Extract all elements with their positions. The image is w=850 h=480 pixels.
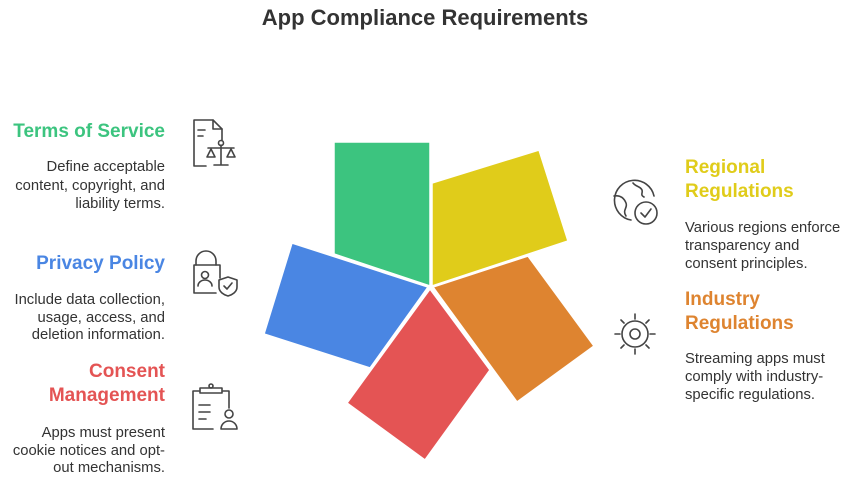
block: terms of service: Define acceptable bbox=[47, 159, 165, 175]
block: consent management: Management bbox=[49, 385, 166, 406]
block: industry regulations: Industry bbox=[685, 289, 760, 310]
block: consent management: Apps must present bbox=[42, 425, 165, 441]
segment: privacy policy bbox=[264, 243, 428, 368]
block: terms of service: content, copyright, and bbox=[15, 178, 165, 194]
block: privacy policy: usage, access, and bbox=[37, 310, 165, 326]
block: industry regulations: Streaming apps must bbox=[685, 351, 825, 367]
block: terms of service: liability terms. bbox=[75, 196, 165, 212]
icon: globe with check bbox=[614, 180, 657, 224]
segment: industry regulations bbox=[433, 256, 594, 402]
block: consent management bbox=[13, 361, 166, 476]
block: terms of service bbox=[13, 121, 165, 212]
block: consent management: cookie notices and opt- bbox=[13, 443, 165, 459]
block: regional regulations: Regulations bbox=[685, 181, 794, 202]
pinwheel chart bbox=[264, 142, 594, 460]
icon: lock with person and shield bbox=[194, 251, 237, 296]
block: industry regulations: comply with industry- bbox=[685, 369, 823, 385]
title: App Compliance Requirements bbox=[262, 5, 588, 30]
block: privacy policy: Privacy Policy bbox=[36, 253, 165, 274]
block: regional regulations: Regional bbox=[685, 157, 765, 178]
block: privacy policy: Include data collection, bbox=[14, 292, 165, 308]
block: privacy policy: deletion information. bbox=[32, 327, 165, 343]
segment: regional regulations bbox=[432, 150, 568, 286]
block: privacy policy bbox=[14, 253, 165, 343]
block: industry regulations bbox=[685, 289, 825, 403]
block: consent management: Consent bbox=[89, 361, 166, 382]
icon: document with scales bbox=[194, 120, 235, 166]
segment: consent management bbox=[347, 289, 490, 460]
block: industry regulations: specific regulations. bbox=[685, 387, 815, 403]
icon: gear/sun bbox=[615, 314, 655, 354]
block: regional regulations: consent principles. bbox=[685, 256, 808, 272]
block: terms of service: Terms of Service bbox=[13, 121, 165, 142]
block: consent management: out mechanisms. bbox=[53, 460, 165, 476]
segment: terms of service bbox=[334, 142, 430, 286]
block: regional regulations: transparency and bbox=[685, 238, 799, 254]
block: regional regulations: Various regions enforce bbox=[685, 220, 840, 236]
block: industry regulations: Regulations bbox=[685, 313, 794, 334]
block: regional regulations bbox=[685, 157, 840, 272]
icon: clipboard with person bbox=[193, 384, 237, 429]
